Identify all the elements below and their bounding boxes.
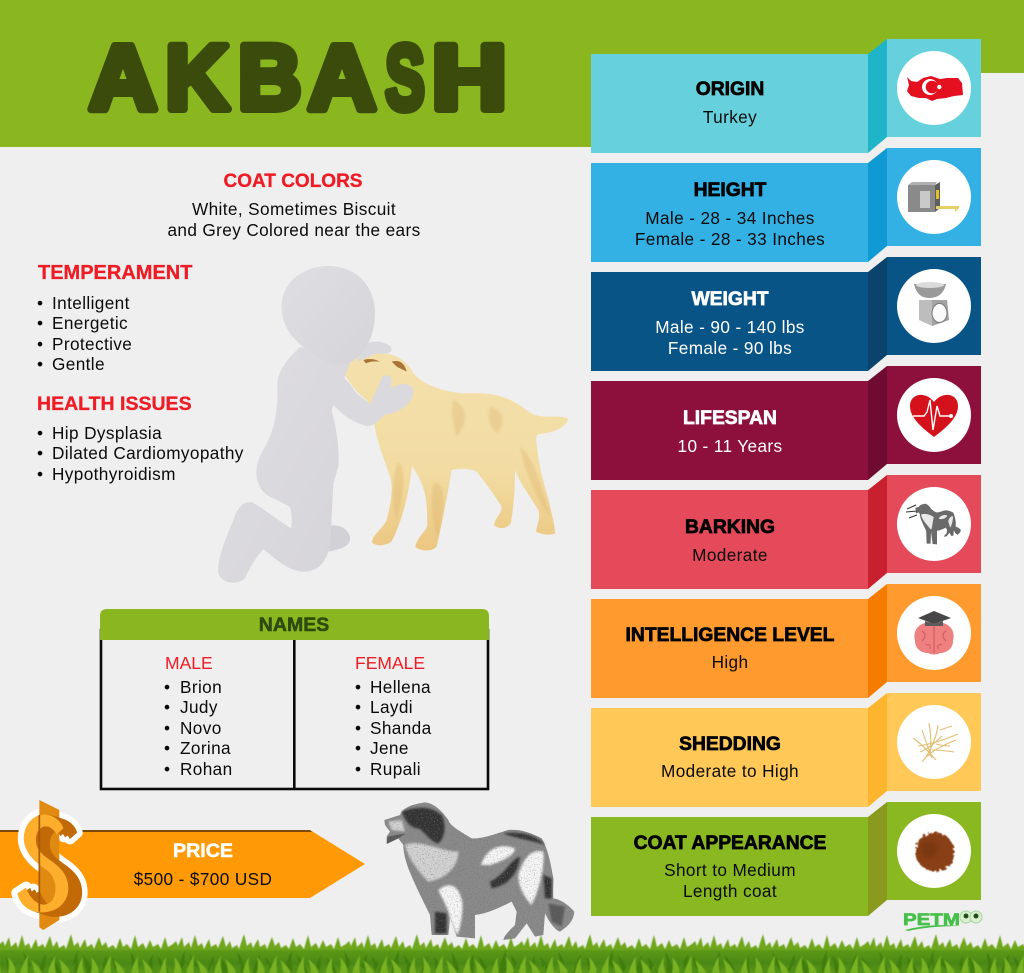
icon: dollar sign	[17, 800, 82, 930]
logo eyes	[960, 911, 982, 923]
dollar bar edge	[37, 815, 42, 912]
column: female names: Jene	[370, 738, 409, 758]
heading: ORIGIN	[696, 79, 764, 100]
dollar outline	[17, 815, 82, 916]
main band	[591, 599, 868, 698]
heading: health issues: HEALTH ISSUES	[37, 393, 192, 415]
health issues list: Dilated Cardiomyopathy	[52, 443, 244, 463]
column: female names: FEMALE	[355, 653, 425, 673]
dog light fur	[388, 820, 458, 882]
column: male names: Zorina	[180, 738, 231, 758]
table divider	[293, 636, 296, 789]
dog tongue	[387, 833, 406, 844]
icon band	[887, 693, 981, 791]
fold	[868, 366, 887, 480]
fold	[868, 802, 887, 916]
column: male names: Judy	[180, 697, 218, 717]
value: Turkey	[703, 107, 757, 127]
panel: health issues	[37, 393, 244, 484]
info panel: coat appearance	[591, 802, 981, 916]
heading: temperament: TEMPERAMENT	[38, 262, 192, 284]
panel: price arrow	[0, 830, 365, 898]
panel: temperament	[37, 262, 192, 374]
fold	[868, 257, 887, 371]
fold	[868, 693, 887, 807]
value line 1: Male - 28 - 34 Inches	[645, 208, 815, 228]
figure back foot	[328, 525, 350, 552]
value line 2: Female - 28 - 33 Inches	[635, 229, 825, 249]
title: H	[432, 27, 507, 129]
temperament list: Intelligent	[52, 293, 130, 313]
heading: WEIGHT	[691, 289, 769, 310]
column: male names: Brion	[180, 677, 222, 697]
price value: $500 - $700 USD	[134, 869, 272, 889]
arrow band	[0, 830, 365, 898]
column: male names: •	[164, 677, 170, 697]
column: male names: MALE	[165, 653, 213, 673]
column: female names: Rupali	[370, 759, 421, 779]
dog white patches	[438, 846, 544, 935]
title: A	[308, 27, 376, 129]
figure body and legs	[218, 347, 350, 583]
heading: coat colors: COAT COLORS	[224, 171, 362, 192]
health issues list: Hypothyroidism	[52, 464, 176, 484]
icon: tape measure	[897, 160, 971, 234]
logo swoosh	[905, 925, 960, 931]
info panel: weight	[591, 257, 981, 371]
title: S	[385, 27, 425, 129]
fold	[868, 39, 887, 153]
dog face and ear	[340, 359, 407, 372]
icon: shed hair	[897, 705, 971, 779]
value: Moderate to High	[661, 761, 799, 781]
value: 10 - 11 Years	[678, 436, 782, 456]
main band	[591, 708, 868, 807]
heading: HEIGHT	[694, 180, 767, 201]
column: female names: •	[355, 738, 361, 758]
fold	[868, 148, 887, 262]
column: female names: Laydi	[370, 697, 413, 717]
title: A	[89, 27, 157, 129]
heading: BARKING	[685, 517, 775, 538]
main band	[591, 817, 868, 916]
figure arm and hand	[318, 362, 413, 426]
icon band	[887, 584, 981, 682]
main band	[591, 272, 868, 371]
main band	[591, 54, 868, 153]
main band	[591, 381, 868, 480]
dollar extrusion	[21, 816, 82, 916]
info panel: height	[591, 148, 981, 262]
value line 2: Length coat	[683, 881, 777, 901]
fold	[868, 584, 887, 698]
figure upper hand	[357, 342, 392, 362]
temperament list: •	[37, 313, 43, 333]
column: female names: •	[355, 718, 361, 738]
info panel: lifespan	[591, 366, 981, 480]
icon band	[887, 148, 981, 246]
temperament list: •	[37, 354, 43, 374]
info panel: intelligence level	[591, 584, 981, 698]
column: female names: Hellena	[370, 677, 431, 697]
info panel: shedding	[591, 693, 981, 807]
main band	[591, 490, 868, 589]
value line 2: Female - 90 lbs	[668, 338, 792, 358]
info panel: origin	[591, 39, 981, 153]
column: female names: •	[355, 697, 361, 717]
column: male names: •	[164, 738, 170, 758]
column: female names: Shanda	[370, 718, 432, 738]
icon band	[887, 39, 981, 137]
info panel: barking	[591, 475, 981, 589]
column: female names: •	[355, 759, 361, 779]
dog dark patches	[402, 808, 552, 933]
icon band	[887, 802, 981, 900]
coat colors text: White, Sometimes Biscuit	[192, 199, 396, 219]
illustration: engraved dog	[384, 802, 574, 940]
icon: fur ball	[897, 814, 971, 888]
icon band	[887, 475, 981, 573]
dollar face	[17, 815, 68, 912]
table header	[100, 609, 489, 640]
temperament list: Energetic	[52, 313, 128, 333]
value line 1: Male - 90 - 140 lbs	[655, 317, 805, 337]
health issues list: •	[37, 443, 43, 463]
temperament list: •	[37, 334, 43, 354]
health issues list: •	[37, 464, 43, 484]
column: male names: Novo	[180, 718, 222, 738]
icon: barking dog	[897, 487, 971, 561]
icon: kitchen scale	[897, 269, 971, 343]
coat colors text line 2: and Grey Colored near the ears	[167, 220, 421, 240]
main band	[591, 163, 868, 262]
illustration: kneeling figure	[218, 266, 413, 583]
panel: names table	[100, 609, 489, 789]
icon: turkey map	[897, 51, 971, 125]
value line 1: Short to Medium	[664, 860, 796, 880]
column: male names: •	[164, 759, 170, 779]
column: male names: Rohan	[180, 759, 233, 779]
health issues list: •	[37, 423, 43, 443]
heading: price: PRICE	[173, 840, 233, 862]
dollar bar	[39, 800, 59, 930]
temperament list: •	[37, 293, 43, 313]
column: female names: •	[355, 677, 361, 697]
dog tail shade	[548, 903, 565, 927]
icon: brain with graduation cap	[897, 596, 971, 670]
logo: petmoo	[903, 910, 982, 931]
arrow top shadow	[0, 830, 312, 832]
icon band	[887, 257, 981, 355]
health issues list	[37, 423, 244, 484]
heading: names: NAMES	[259, 614, 329, 636]
column: male names: •	[164, 697, 170, 717]
heading: LIFESPAN	[683, 408, 777, 429]
health issues list: Hip Dysplasia	[52, 423, 162, 443]
heading: INTELLIGENCE LEVEL	[626, 625, 835, 646]
panel: coat colors	[167, 171, 421, 240]
value: High	[712, 652, 748, 672]
figure head	[282, 266, 375, 365]
heading: SHEDDING	[679, 734, 781, 755]
temperament list: Gentle	[52, 354, 105, 374]
illustration: golden dog	[340, 352, 568, 550]
temperament list	[37, 293, 132, 374]
heading: COAT APPEARANCE	[634, 833, 827, 854]
title: B	[238, 27, 301, 129]
icon: heart with pulse	[897, 378, 971, 452]
table body	[101, 630, 488, 789]
title: K	[165, 27, 229, 129]
value: Moderate	[692, 545, 768, 565]
column: female names	[355, 653, 432, 779]
column: male names: •	[164, 718, 170, 738]
icon band	[887, 366, 981, 464]
fold	[868, 475, 887, 589]
logo: petmoo: PETM	[903, 910, 960, 929]
column: male names	[164, 653, 233, 779]
header band	[0, 0, 1024, 147]
temperament list: Protective	[52, 334, 132, 354]
dog shading	[393, 400, 550, 540]
grass	[0, 932, 1024, 973]
